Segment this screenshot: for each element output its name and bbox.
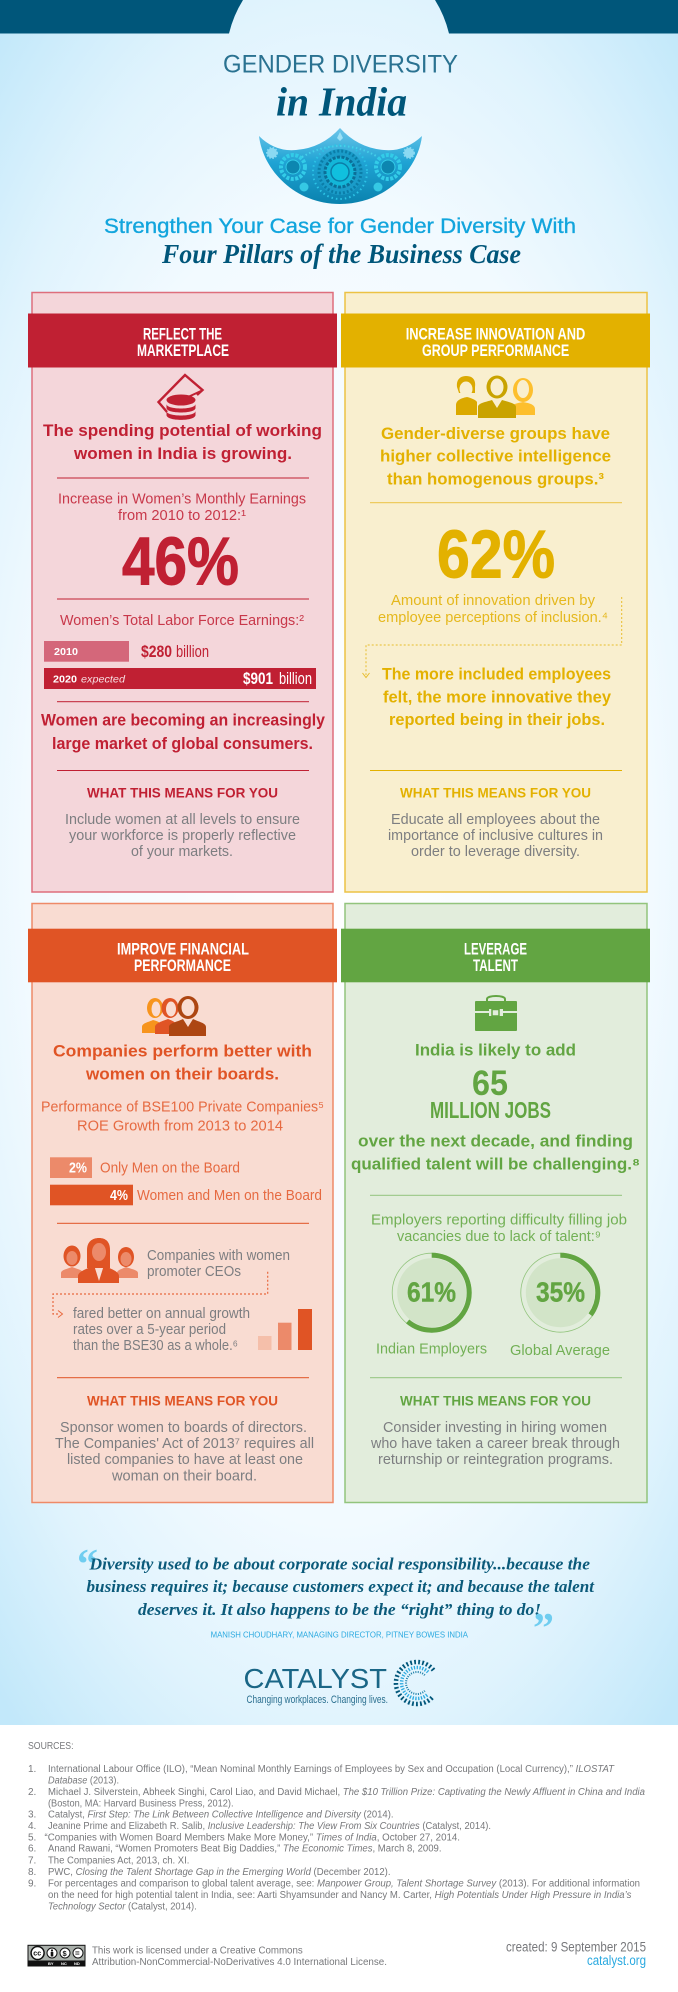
monthly earnings label: [58, 491, 306, 524]
source list: 3.: [28, 1810, 36, 1821]
license text: Attribution-NonCommercial-NoDerivatives 4.0 International License.: [92, 1957, 387, 1968]
arrow: dashed connector: [53, 1272, 268, 1318]
header: improve financial performance: PERFORMANCE: [134, 956, 231, 975]
conclusion: [41, 711, 325, 753]
headline: Companies perform better with: [53, 1042, 312, 1061]
source list: 4.: [28, 1821, 36, 1832]
header: increase innovation: INCREASE INNOVATION AND: [406, 324, 585, 344]
growth text: than the BSE30 as a whole.⁶: [73, 1338, 238, 1354]
headline: MILLION JOBS: [430, 1097, 551, 1123]
what this means for you: Educate all employees about the: [391, 812, 600, 828]
source list: 7.: [28, 1855, 36, 1866]
headline: India is likely to add: [415, 1041, 576, 1060]
source list: 1.: [28, 1764, 36, 1775]
headline: women on their boards.: [85, 1064, 279, 1083]
what this means for you: WHAT THIS MEANS FOR YOU: [400, 1393, 591, 1409]
bar: 2020 expected: billion: [279, 669, 312, 688]
growth text: rates over a 5-year period: [73, 1322, 226, 1338]
donut chart: Indian employers 61%: 61%: [407, 1276, 456, 1307]
icon: opening quote mark: “: [77, 1542, 98, 1588]
subtitle: Four Pillars of the Business Case: [161, 239, 521, 269]
top banner with arched notch: [0, 0, 678, 34]
headline: 65: [472, 1064, 508, 1103]
what this means for you: of your markets.: [131, 844, 233, 860]
monthly earnings label: from 2010 to 2012:¹: [118, 508, 246, 524]
bar: 2020 expected: 2020: [53, 674, 77, 686]
source list: PWC, Closing the Talent Shortage Gap in the Emerging World (December 2012).: [48, 1867, 390, 1878]
header: improve financial performance: [28, 929, 337, 982]
bar: only men: [50, 1157, 240, 1178]
header: reflect the marketplace: [28, 314, 337, 368]
icon: radial C mark: [396, 1662, 434, 1704]
board performance label: [41, 1100, 324, 1135]
inclusion statement: [382, 664, 612, 729]
bar: women and men: 4%: [110, 1187, 128, 1204]
icon: rising bars: [258, 1309, 312, 1350]
creation date and site: [506, 1940, 646, 1968]
title: [223, 50, 458, 125]
earnings chart label: Women’s Total Labor Force Earnings:²: [60, 613, 304, 629]
header: reflect the marketplace: MARKETPLACE: [137, 341, 229, 360]
innovation caption: Amount of innovation driven by: [391, 593, 596, 609]
icon: closing quote mark: ”: [533, 1606, 554, 1652]
source list: Anand Rawani, “Women Promoters Beat Big Daddies,” The Economic Times, March 8, 2009.: [48, 1844, 442, 1855]
header: leverage talent: [341, 929, 650, 982]
what this means for you: order to leverage diversity.: [411, 844, 580, 860]
icon: Creative Commons badge: [28, 1945, 85, 1966]
what this means for you: importance of inclusive cultures in: [388, 828, 603, 844]
headline: Gender-diverse groups have: [381, 424, 610, 443]
icon: Creative Commons badge: ND: [74, 1961, 80, 1966]
quote text: Diversity used to be about corporate social responsibility...because the: [88, 1554, 590, 1573]
what this means for you: WHAT THIS MEANS FOR YOU: [400, 784, 591, 800]
what this means for you: your workforce is properly reflective: [69, 828, 296, 844]
icon: briefcase: [475, 996, 517, 1031]
donut chart: Indian employers 61%: Indian Employers: [376, 1341, 487, 1357]
bar: 2010: [44, 641, 209, 662]
header: leverage talent: LEVERAGE: [464, 939, 527, 958]
panel: improve financial performance: [28, 904, 337, 1502]
bar chart: total earnings: [44, 641, 316, 689]
what this means for you: who have taken a career break through: [370, 1436, 620, 1452]
bar: only men: 2%: [69, 1160, 87, 1177]
what this means for you: Consider investing in hiring women: [383, 1420, 607, 1436]
icon: Creative Commons badge: =: [75, 1949, 80, 1958]
bar: 2020 expected: [44, 668, 316, 689]
source list: Michael J. Silverstein, Abheek Singhi, Carol Liao, and David Michael, The $10 Trillion Prize: Captivating the Newly Affluent in China and India: [48, 1787, 645, 1798]
statistic: 46%: 46%: [122, 524, 239, 600]
innovation caption: employee perceptions of inclusion.⁴: [378, 610, 608, 626]
panel: increase innovation: [341, 292, 650, 892]
headline: than homogenous groups.³: [387, 469, 604, 488]
quote attribution: MANISH CHOUDHARY, MANAGING DIRECTOR, PITNEY BOWES INDIA: [211, 1630, 468, 1640]
bar: 2010: $280: [141, 642, 172, 661]
headline: [351, 1041, 640, 1173]
bar: 2020 expected: expected: [81, 674, 126, 686]
women promoter CEOs text: [147, 1248, 290, 1280]
source list: International Labour Office (ILO), “Mean Nominal Monthly Earnings of Employees by Sex and Occupation (Local Currency),” ILOSTAT: [48, 1764, 615, 1775]
donut chart: global average 35%: [510, 1253, 610, 1359]
icon: banknote and coins: [158, 375, 202, 420]
inclusion statement: The more included employees: [382, 664, 611, 683]
bar: only men: Only Men on the Board: [100, 1161, 240, 1177]
header: improve financial performance: IMPROVE FINANCIAL: [117, 939, 249, 958]
logo: Catalyst: Changing workplaces. Changing lives.: [246, 1694, 388, 1706]
title: GENDER DIVERSITY: [223, 50, 458, 78]
what this means for you: Include women at all levels to ensure: [65, 812, 300, 828]
icon: Creative Commons badge: cc: [33, 1950, 41, 1958]
what this means for you: woman on their board.: [111, 1469, 257, 1485]
source list: Database (2013).: [48, 1775, 119, 1786]
board performance label: ROE Growth from 2013 to 2014: [77, 1119, 283, 1135]
what this means for you: [55, 1393, 314, 1485]
what this means for you: [388, 784, 603, 860]
what this means for you: [370, 1393, 620, 1468]
board performance label: Performance of BSE100 Private Companies⁵: [41, 1100, 324, 1116]
employers label: vacancies due to lack of talent:⁹: [397, 1229, 601, 1245]
quote: [77, 1542, 595, 1652]
icon: three women: [142, 996, 206, 1036]
women promoter CEOs text: promoter CEOs: [147, 1264, 241, 1280]
icon: mandala ornament: [259, 128, 422, 205]
sources heading: SOURCES:: [28, 1741, 74, 1752]
monthly earnings label: Increase in Women’s Monthly Earnings: [58, 491, 306, 507]
header: reflect the marketplace: REFLECT THE: [143, 324, 222, 344]
innovation caption: [378, 593, 608, 626]
creation date and site: catalyst.org: [587, 1953, 646, 1968]
headline: [43, 421, 322, 463]
conclusion: large market of global consumers.: [52, 734, 313, 753]
inclusion statement: felt, the more innovative they: [383, 687, 612, 706]
donut chart: global average 35%: Global Average: [510, 1343, 610, 1359]
what this means for you: WHAT THIS MEANS FOR YOU: [87, 1393, 278, 1409]
subtitle: [104, 215, 576, 269]
icon: women leaders: [61, 1238, 138, 1283]
quote text: deserves it. It also happens to be the “right” thing to do!: [138, 1600, 541, 1619]
source list: Jeanine Prime and Elizabeth R. Salib, Inclusive Leadership: The View From Six Countries (Catalyst, 2014).: [48, 1821, 491, 1832]
source list: 9.: [28, 1878, 36, 1889]
growth text: [73, 1306, 250, 1354]
source list: 5.: [28, 1832, 36, 1843]
icon: three people: [456, 376, 535, 418]
subtitle: Strengthen Your Case for Gender Diversity With: [104, 215, 576, 238]
header: increase innovation: GROUP PERFORMANCE: [422, 341, 569, 360]
what this means for you: WHAT THIS MEANS FOR YOU: [87, 784, 278, 800]
source list: 2.: [28, 1787, 36, 1798]
logo: Catalyst: CATALYST: [244, 1663, 387, 1694]
sources: [28, 1741, 645, 1912]
bar: women and men: Women and Men on the Board: [137, 1188, 322, 1204]
quote text: [86, 1554, 595, 1619]
bar: 2020 expected: $901: [243, 669, 273, 688]
source list: For percentages and comparison to global talent average, see: Manpower Group, Talent Shortage Survey (2013). For additional information: [48, 1878, 640, 1889]
source list: (Boston, MA: Harvard Business Press, 2012).: [48, 1798, 234, 1809]
growth text: fared better on annual growth: [73, 1306, 250, 1322]
icon: Creative Commons badge: NC: [61, 1961, 67, 1966]
conclusion: Women are becoming an increasingly: [41, 711, 325, 730]
source list: The Companies Act, 2013, ch. XI.: [48, 1855, 189, 1866]
title: in India: [276, 79, 407, 125]
logo: Catalyst: [244, 1662, 434, 1706]
headline: women in India is growing.: [73, 444, 292, 463]
source list: 8.: [28, 1867, 36, 1878]
source list: “Companies with Women Board Members Make More Money,” Times of India, October 27, 2014.: [44, 1832, 460, 1843]
icon: Creative Commons badge: BY: [48, 1961, 54, 1966]
what this means for you: [65, 784, 300, 860]
source list: on the need for high potential talent in India, see: Aarti Shyamsunder and Nancy M. Carter, High Potentials Under High Pressure in India’s: [48, 1890, 631, 1901]
bar chart: ROE growth: [50, 1157, 322, 1205]
headline: qualified talent will be challenging.⁸: [351, 1154, 640, 1173]
headline: [53, 1042, 312, 1083]
panel: reflect the marketplace: [28, 292, 337, 892]
creation date and site: created: 9 September 2015: [506, 1940, 646, 1955]
donut chart: global average 35%: 35%: [536, 1276, 585, 1307]
quote text: business requires it; because customers expect it; and because the talent: [86, 1577, 595, 1596]
bar: 2010: 2010: [54, 646, 78, 658]
what this means for you: returnship or reintegration programs.: [378, 1452, 613, 1468]
headline: [380, 424, 611, 488]
header: increase innovation: [341, 314, 650, 368]
headline: over the next decade, and finding: [358, 1132, 633, 1151]
employers label: [371, 1212, 627, 1245]
source list: [28, 1764, 645, 1912]
license text: [92, 1945, 387, 1968]
icon: Creative Commons badge: $: [62, 1949, 68, 1958]
source list: Technology Sector (Catalyst, 2014).: [48, 1901, 197, 1912]
panel: leverage talent: [341, 904, 650, 1502]
source list: 6.: [28, 1844, 36, 1855]
what this means for you: listed companies to have at least one: [67, 1452, 303, 1468]
source list: Catalyst, First Step: The Link Between Collective Intelligence and Diversity (2014).: [48, 1810, 394, 1821]
bar: 2010: billion: [176, 642, 209, 661]
donut chart: Indian employers 61%: [376, 1253, 487, 1357]
statistic: 62%: 62%: [437, 517, 555, 593]
header: leverage talent: TALENT: [473, 956, 518, 975]
women promoter CEOs text: Companies with women: [147, 1248, 290, 1264]
employers label: Employers reporting difficulty filling job: [371, 1212, 627, 1228]
inclusion statement: reported being in their jobs.: [389, 710, 605, 729]
what this means for you: Sponsor women to boards of directors.: [60, 1420, 307, 1436]
license text: This work is licensed under a Creative Commons: [92, 1945, 303, 1956]
headline: The spending potential of working: [43, 421, 322, 440]
bar: women and men: [50, 1185, 322, 1205]
headline: higher collective intelligence: [380, 447, 611, 466]
what this means for you: The Companies' Act of 2013⁷ requires all: [55, 1436, 314, 1452]
arrow: dashed connector: [362, 597, 622, 678]
